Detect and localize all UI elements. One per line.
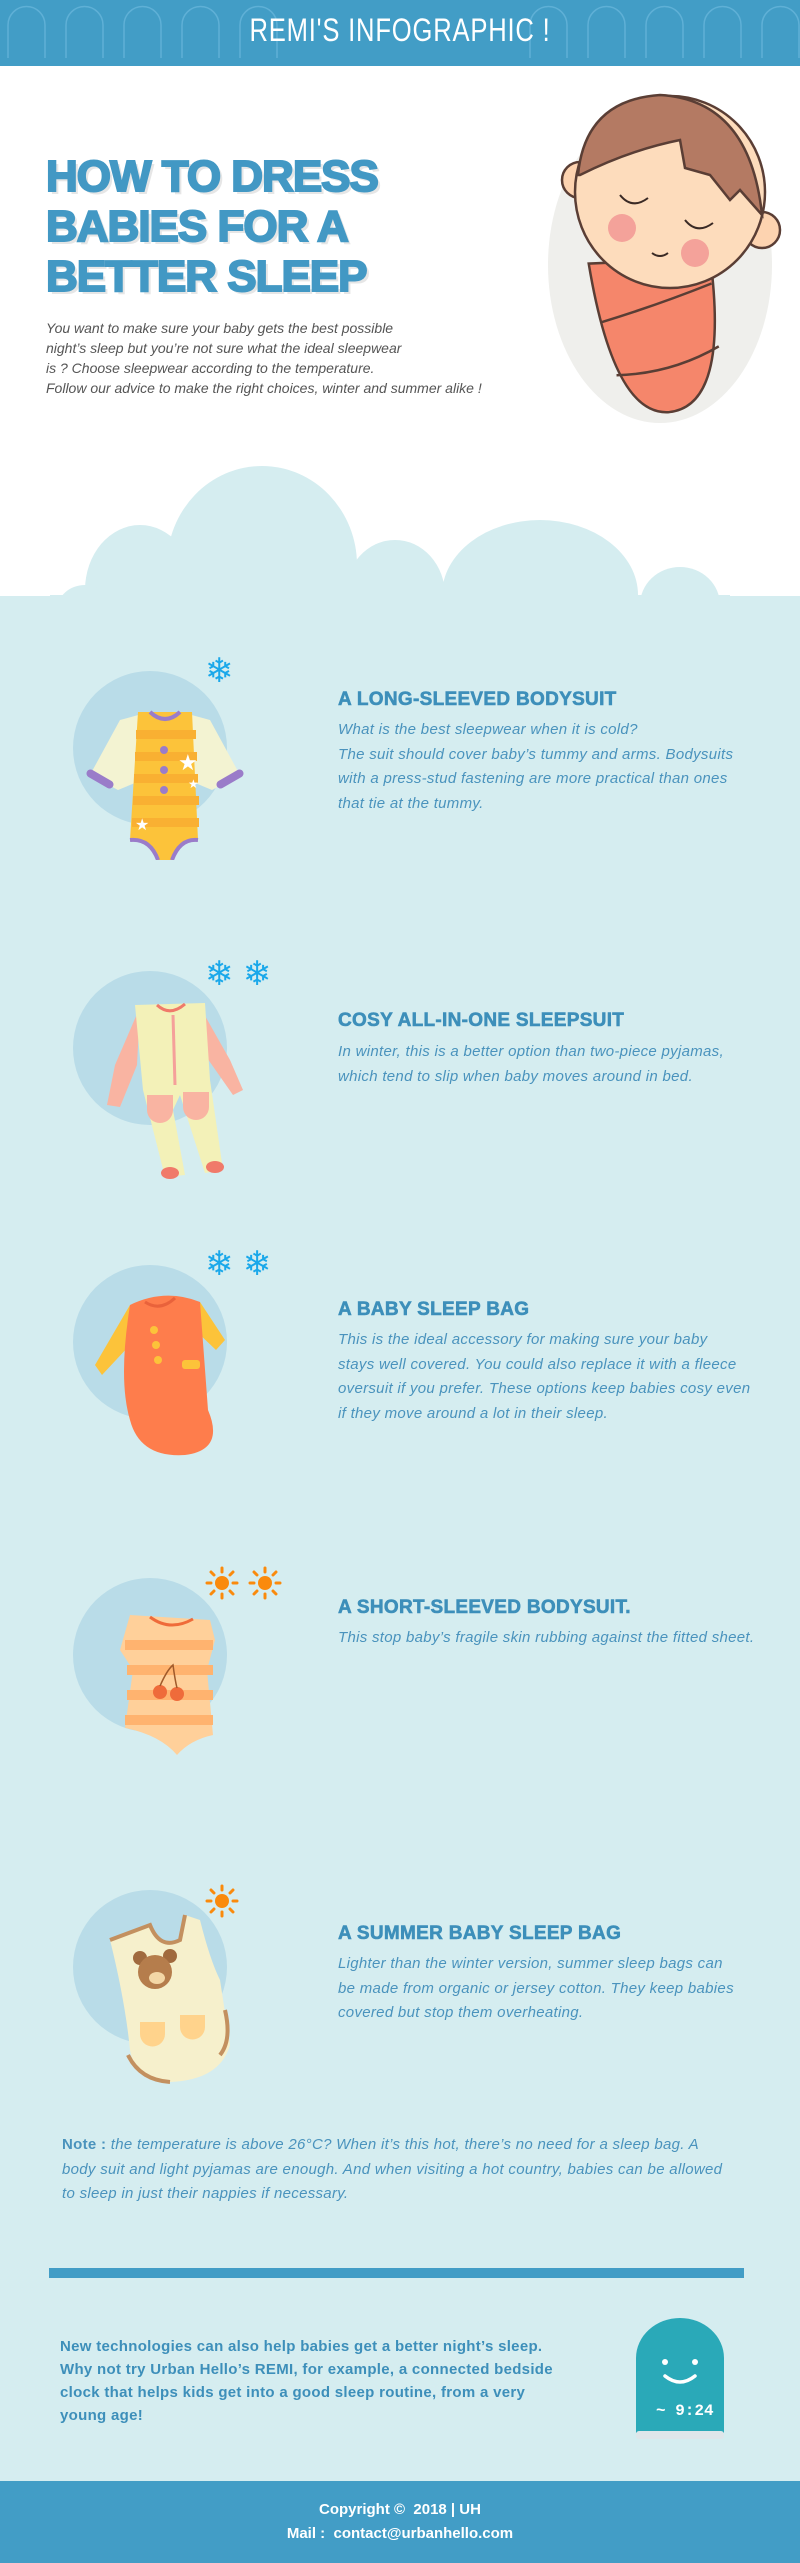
text 5: covered but stop them overheating. bbox=[338, 2004, 583, 2021]
promo text: New technologies can also help babies get a better night’s sleep. bbox=[60, 2338, 542, 2355]
icon: blue circle bbox=[73, 971, 227, 1125]
icon: blue circle bbox=[73, 671, 227, 825]
white hero area bbox=[0, 66, 800, 596]
text 2 bbox=[338, 1043, 724, 1084]
text 3: oversuit if you prefer. These options keep babies cosy even bbox=[338, 1380, 750, 1397]
icon: blue circle bbox=[73, 1265, 227, 1419]
intro text: is ? Choose sleepwear according to the temperature. bbox=[46, 360, 374, 376]
illustration: bodysuit: ★ bbox=[188, 777, 199, 791]
text 3: if they move around a lot in their sleep. bbox=[338, 1404, 608, 1422]
main title bbox=[46, 152, 380, 301]
text 2: In winter, this is a better option than two-piece pyjamas, bbox=[338, 1043, 724, 1060]
text 1 bbox=[338, 721, 733, 812]
icon: blue circle bbox=[73, 1578, 227, 1732]
clouds bbox=[50, 466, 730, 596]
item 2: sleepsuit bbox=[73, 955, 271, 1179]
intro text bbox=[46, 320, 482, 396]
text 4: This stop baby’s fragile skin rubbing against the fitted sheet. bbox=[338, 1629, 754, 1646]
illustration: sleep bag bbox=[95, 1296, 225, 1456]
illustration: swaddled baby bbox=[548, 94, 782, 423]
icon: sun bbox=[206, 1884, 238, 1918]
icon: REMI clock device: ~ 9:24 bbox=[656, 2402, 714, 2420]
promo text: Why not try Urban Hello’s REMI, for example, a connected bedside bbox=[60, 2361, 553, 2378]
item 4: short-sleeved bodysuit bbox=[73, 1566, 282, 1755]
heading 3: A BABY SLEEP BAG bbox=[338, 1299, 529, 1320]
text 1: What is the best sleepwear when it is cold? bbox=[338, 721, 638, 738]
heading 4: A SHORT-SLEEVED BODYSUIT. bbox=[338, 1597, 631, 1618]
note: body suit and light pyjamas are enough. And when visiting a hot country, babies can be allowed bbox=[62, 2160, 722, 2178]
text 5 bbox=[338, 1955, 734, 2021]
illustration: bodysuit bbox=[86, 710, 244, 860]
heading 5: A SUMMER BABY SLEEP BAG bbox=[338, 1923, 621, 1944]
text 2: which tend to slip when baby moves around in bed. bbox=[338, 1068, 693, 1084]
icon: snowflakes: ❄ ❄ bbox=[205, 1245, 271, 1283]
text 5: be made from organic or jersey cotton. They keep babies bbox=[338, 1980, 734, 1996]
item 5: summer sleep bag bbox=[73, 1884, 238, 2084]
heading 2: COSY ALL-IN-ONE SLEEPSUIT bbox=[338, 1010, 624, 1031]
illustration: bodysuit: ★ bbox=[178, 750, 198, 775]
note: Note : the temperature is above 26°C? When it’s this hot, there’s no need for a sleep bag. A bbox=[62, 2136, 699, 2153]
illustration: short-sleeved bodysuit bbox=[120, 1615, 215, 1755]
text 1: with a press-stud fastening are more practical than ones bbox=[338, 770, 728, 787]
main title: BETTER SLEEP bbox=[46, 252, 366, 301]
heading 1: A LONG-SLEEVED BODYSUIT bbox=[338, 689, 617, 710]
item 1: long-sleeved bodysuit bbox=[73, 652, 244, 860]
promo text: clock that helps kids get into a good sleep routine, from a very bbox=[60, 2384, 525, 2401]
footer bbox=[0, 2481, 800, 2563]
text 3 bbox=[338, 1331, 750, 1422]
footer: Copyright © 2018 | UH bbox=[319, 2501, 481, 2518]
promo text bbox=[60, 2338, 553, 2424]
note: to sleep in just their nappies if necessary. bbox=[62, 2185, 348, 2202]
icon: snowflakes: ❄ ❄ bbox=[205, 955, 271, 993]
note bbox=[62, 2136, 722, 2202]
main title: HOW TO DRESS bbox=[46, 152, 378, 201]
header bar bbox=[0, 0, 800, 66]
text 3: This is the ideal accessory for making sure your baby bbox=[338, 1331, 707, 1348]
item 3: sleep bag bbox=[73, 1245, 271, 1456]
text 5: Lighter than the winter version, summer sleep bags can bbox=[338, 1955, 723, 1972]
header title: REMI'S INFOGRAPHIC ! bbox=[249, 12, 551, 48]
intro text: Follow our advice to make the right choices, winter and summer alike ! bbox=[46, 380, 482, 396]
text 3: stays well covered. You could also replace it with a fleece bbox=[338, 1356, 736, 1372]
illustration: summer sleep bag with bear bbox=[109, 1914, 230, 2084]
icon: suns bbox=[206, 1566, 282, 1600]
text 1: The suit should cover baby’s tummy and arms. Bodysuits bbox=[338, 746, 733, 762]
footer: Mail : contact@urbanhello.com bbox=[287, 2525, 513, 2542]
illustration: sleepsuit bbox=[107, 1003, 243, 1179]
divider bar bbox=[49, 2268, 744, 2278]
icon: REMI clock device bbox=[636, 2318, 724, 2439]
icon: blue circle bbox=[73, 1890, 227, 2044]
text 1: that tie at the tummy. bbox=[338, 794, 484, 812]
icon: snowflake: ❄ bbox=[205, 652, 234, 690]
main title: BABIES FOR A bbox=[46, 202, 348, 251]
illustration: bodysuit: ★ bbox=[135, 817, 149, 834]
intro text: You want to make sure your baby gets the best possible bbox=[46, 320, 393, 336]
promo text: young age! bbox=[60, 2407, 143, 2424]
intro text: night’s sleep but you’re not sure what the ideal sleepwear bbox=[46, 340, 401, 356]
